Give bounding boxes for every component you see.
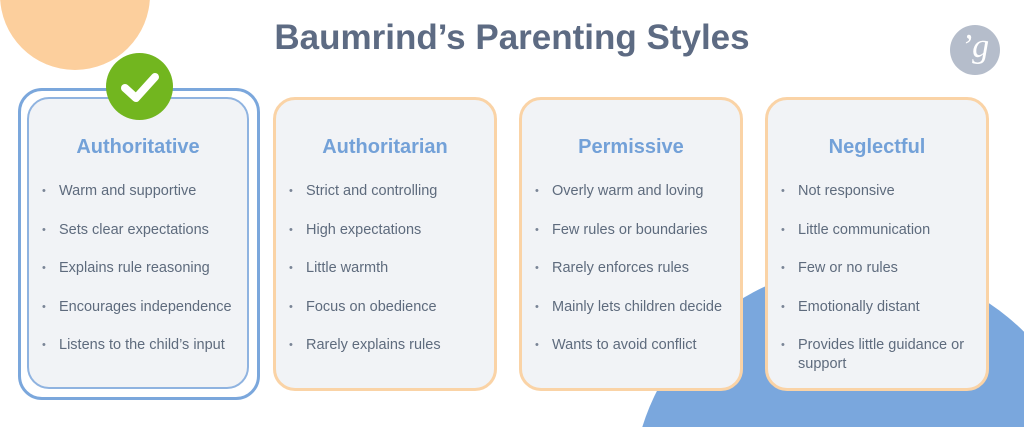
panel: authoritarian: Strict and controlling bbox=[306, 183, 437, 199]
panel: authoritarian: Authoritarian bbox=[322, 136, 448, 158]
panel: neglectful: Few or no rules bbox=[798, 260, 898, 276]
title: Baumrind’s Parenting Styles bbox=[274, 18, 750, 57]
panel: neglectful: Not responsive bbox=[798, 183, 895, 199]
panel: neglectful: Emotionally distant bbox=[798, 298, 920, 314]
panel: neglectful: Little communication bbox=[798, 222, 930, 238]
panel: authoritative bbox=[27, 97, 249, 389]
panel: authoritarian: High expectations bbox=[306, 222, 421, 238]
panel: permissive: Mainly lets children decide bbox=[552, 298, 722, 314]
icon: logo: ’g bbox=[961, 28, 989, 65]
panel: authoritative: Warm and supportive bbox=[59, 183, 196, 199]
panel: authoritative: Authoritative bbox=[76, 136, 200, 158]
panel: authoritarian: Focus on obedience bbox=[306, 298, 437, 314]
panel: neglectful: Provides little guidance or support bbox=[798, 337, 964, 372]
panel: authoritarian: Rarely explains rules bbox=[306, 337, 441, 353]
panel: neglectful: Neglectful bbox=[829, 136, 925, 158]
panel: authoritative: Listens to the child’s input bbox=[59, 337, 225, 353]
panel: authoritarian bbox=[273, 97, 497, 391]
icon: logo bbox=[950, 25, 1000, 75]
panel: permissive: Rarely enforces rules bbox=[552, 260, 689, 276]
panel: authoritative: Encourages independence bbox=[59, 298, 232, 314]
panel: authoritative: Explains rule reasoning bbox=[59, 260, 210, 276]
panel: permissive: Wants to avoid conflict bbox=[552, 337, 697, 353]
panel: authoritarian: Little warmth bbox=[306, 260, 388, 276]
icon: check bbox=[106, 53, 173, 120]
panel: permissive: Overly warm and loving bbox=[552, 183, 704, 199]
panel: authoritative outer frame bbox=[18, 88, 260, 400]
panel: permissive bbox=[519, 97, 743, 391]
panel: permissive: Few rules or boundaries bbox=[552, 222, 708, 238]
panel: neglectful bbox=[765, 97, 989, 391]
panel: authoritative: Sets clear expectations bbox=[59, 222, 209, 238]
panel: permissive: Permissive bbox=[578, 136, 684, 158]
